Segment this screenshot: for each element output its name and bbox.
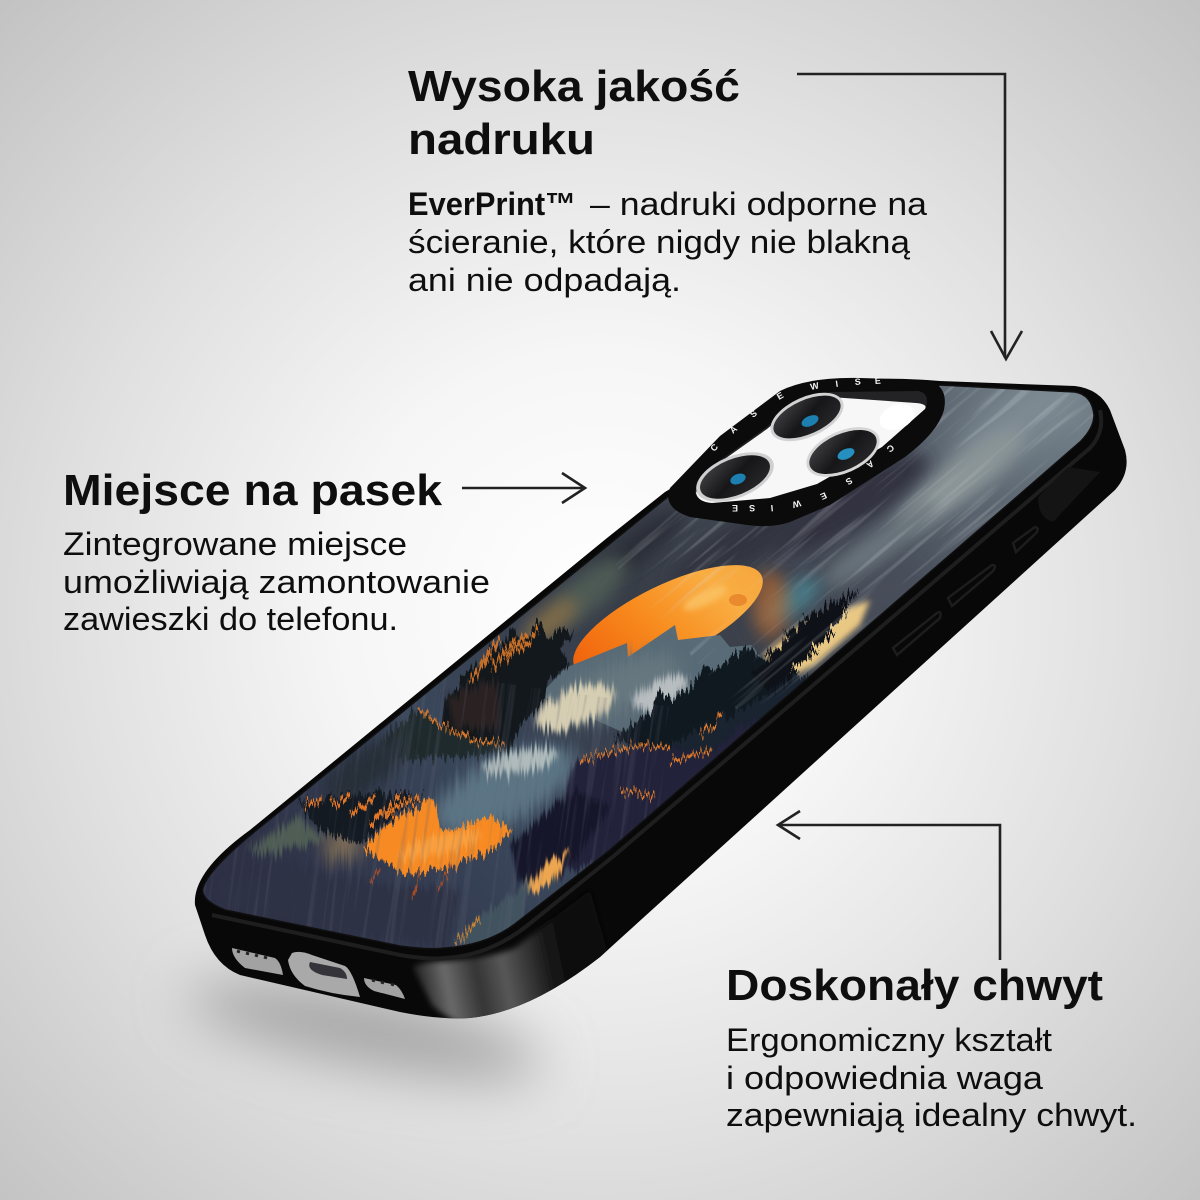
text: print quality: ani nie odpadają. xyxy=(408,262,681,298)
reflected moon xyxy=(363,797,513,874)
reflection drips xyxy=(370,866,452,898)
heading: strap mount: Miejsce na pasek xyxy=(63,466,443,515)
reflected trees left xyxy=(297,793,425,845)
horizon glow xyxy=(763,600,870,680)
arrow: strap mount xyxy=(462,473,585,503)
text: grip: zapewniają idealny chwyt. xyxy=(726,1097,1137,1133)
lens top xyxy=(763,383,851,451)
left olive bank xyxy=(247,817,360,860)
flash xyxy=(876,399,918,435)
callout: grip xyxy=(726,961,1137,1133)
heading: print quality xyxy=(408,62,740,164)
lower dark reflection xyxy=(340,876,459,948)
glossy corner xyxy=(413,923,610,1018)
button: side xyxy=(1013,527,1038,552)
phone case xyxy=(194,378,1127,1018)
dark forest left xyxy=(440,622,575,752)
usb-c port xyxy=(288,952,360,997)
phone shadow xyxy=(181,960,549,1100)
dark forest right xyxy=(613,648,797,750)
printed artwork xyxy=(203,386,1094,948)
painted foreground xyxy=(213,590,860,948)
arrow: grip xyxy=(778,811,1000,960)
heading: print quality: Wysoka jakość xyxy=(408,62,740,111)
callout: strap mount xyxy=(63,466,490,637)
speaker left xyxy=(232,948,283,975)
dark band below forest xyxy=(668,672,810,758)
button: action xyxy=(893,612,941,655)
text: print quality: EverPrint™ xyxy=(408,186,576,222)
text: strap mount xyxy=(63,526,490,637)
moon reflection highlight xyxy=(397,825,483,865)
lens left xyxy=(689,442,781,512)
ring lettering bottom: CASEWISE xyxy=(732,442,896,513)
heading: grip: Doskonały chwyt xyxy=(726,961,1103,1010)
misty valley xyxy=(529,642,692,740)
text: print quality: – nadruki odporne na xyxy=(590,186,927,222)
tall pine xyxy=(750,590,860,690)
artwork base xyxy=(190,375,1110,965)
camera plate white xyxy=(696,397,926,503)
sky clouds xyxy=(516,390,1076,640)
mountains xyxy=(545,625,761,732)
rim highlight xyxy=(212,410,1101,959)
lower brush streaks xyxy=(204,678,669,948)
speaker right xyxy=(364,978,405,999)
lower right reflections xyxy=(452,790,610,948)
arrow: print quality xyxy=(797,74,1022,359)
button: volume xyxy=(948,565,995,606)
heading: print quality: nadruku xyxy=(408,115,595,164)
lens right xyxy=(799,417,887,487)
case body xyxy=(195,379,1127,1018)
moon xyxy=(573,564,796,664)
print edge xyxy=(203,385,1094,949)
camera island xyxy=(668,376,945,526)
text: grip xyxy=(726,1022,1137,1133)
ring lettering top: CASEWISE xyxy=(708,376,881,453)
dark lower shore xyxy=(540,718,770,880)
text: print quality: ścieranie, które nigdy nie blakną xyxy=(408,224,910,260)
callout: print quality xyxy=(408,62,927,298)
camera ring xyxy=(668,378,945,526)
text: strap mount: zawieszki do telefonu. xyxy=(63,601,398,637)
text: grip: Ergonomiczny kształt xyxy=(726,1022,1052,1058)
lake xyxy=(322,730,582,832)
text: strap mount: umożliwiają zamontowanie xyxy=(63,564,490,600)
text: print quality xyxy=(408,186,927,298)
sky brush streaks xyxy=(618,386,1093,710)
dark shore xyxy=(380,710,508,760)
text: grip: i odpowiednia waga xyxy=(726,1060,1043,1096)
strap mount xyxy=(1038,467,1100,522)
text: strap mount: Zintegrowane miejsce xyxy=(63,526,407,562)
camera plate xyxy=(695,391,927,503)
